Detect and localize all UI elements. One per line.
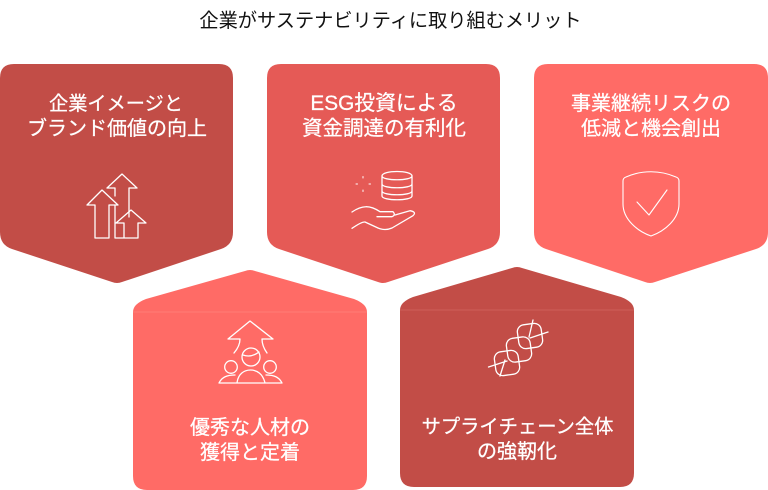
heading: supply chain: サプライチェーン全体 (422, 416, 613, 438)
panel: ESG finance (267, 64, 500, 283)
icon: people and arrow (219, 321, 282, 383)
heading: risk reduction: 低減と機会創出 (581, 117, 721, 140)
icon: hand holding coins (352, 172, 414, 230)
heading: talent: 獲得と定着 (200, 441, 300, 464)
title: 企業がサステナビリティに取り組むメリット (199, 10, 582, 32)
icon: chain links (488, 320, 548, 377)
panel: talent (133, 270, 367, 490)
panel: brand image (0, 64, 233, 283)
panel: supply chain (400, 267, 634, 487)
heading: ESG finance: ESG投資による (310, 92, 458, 115)
heading: supply chain: の強靭化 (477, 440, 557, 463)
heading: risk reduction: 事業継続リスクの (571, 93, 731, 115)
icon: shield with check (623, 172, 679, 236)
heading: ESG finance: 資金調達の有利化 (302, 117, 466, 140)
heading: brand image: 企業イメージと (49, 93, 183, 115)
heading: talent: 優秀な人材の (190, 417, 310, 439)
icon: rising arrows (87, 174, 146, 238)
heading: brand image: ブランド価値の向上 (27, 116, 207, 140)
panel: risk reduction (534, 64, 768, 283)
